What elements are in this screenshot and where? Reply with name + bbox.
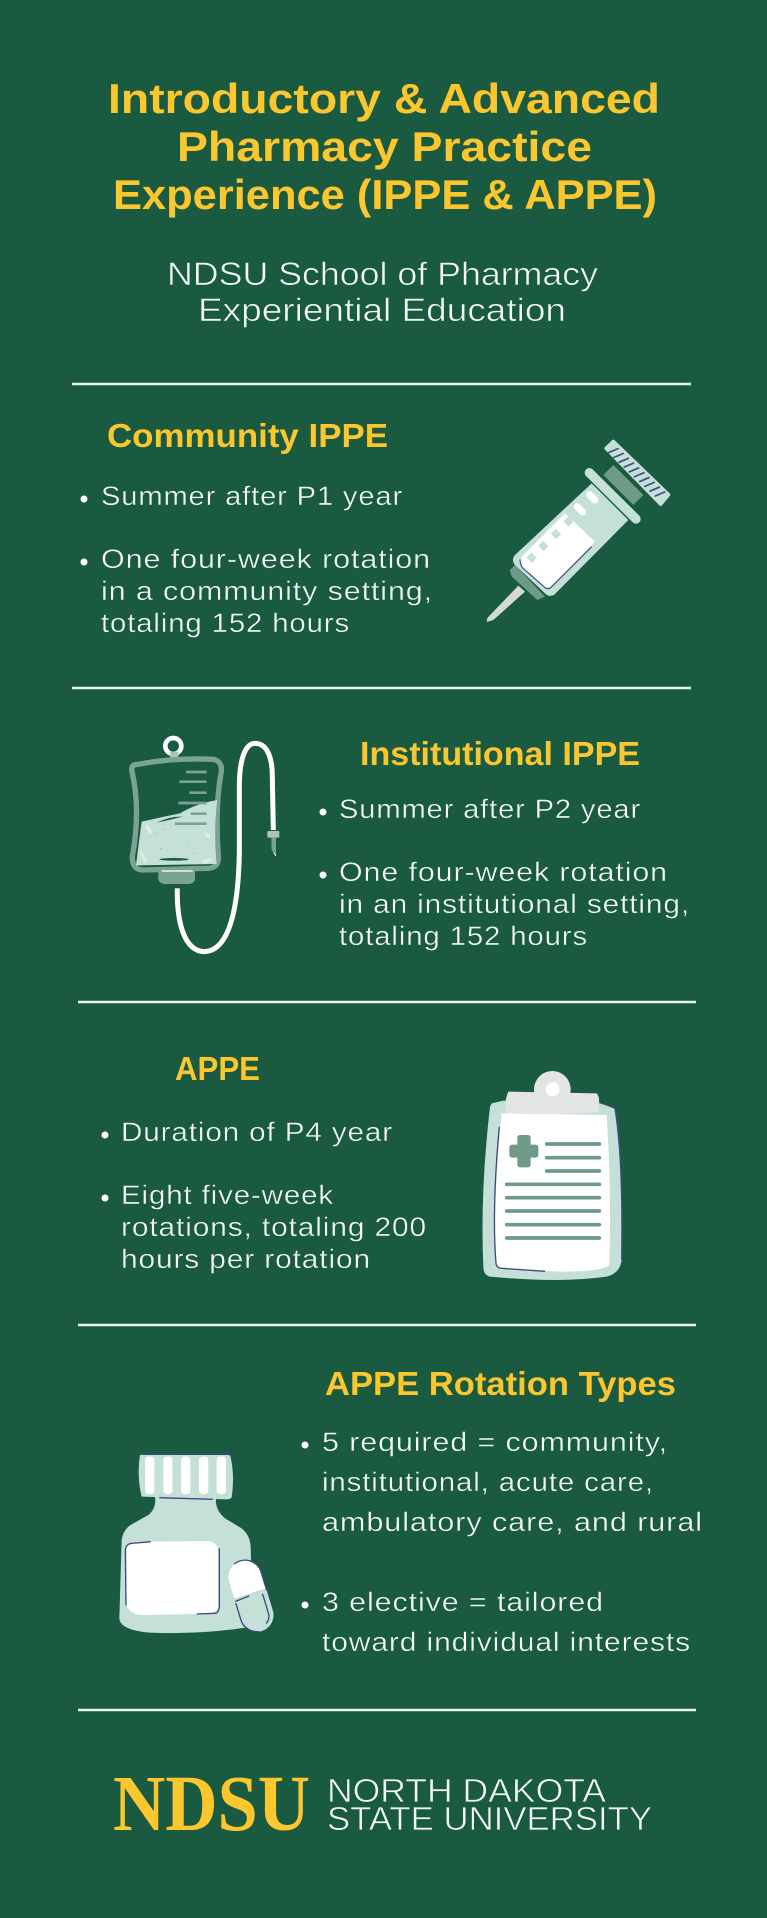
- heading: Institutional IPPE: Institutional IPPE: [360, 735, 640, 772]
- title: Pharmacy Practice: [177, 123, 592, 170]
- title: Introductory & Advanced: [108, 75, 660, 122]
- logo: NDSU North Dakota State University: NORTH DAKOTA: [327, 1773, 607, 1810]
- bullet list: Institutional IPPE: totaling 152 hours: [339, 921, 588, 951]
- bullet list: Institutional IPPE: Summer after P2 year: [339, 794, 641, 824]
- bullet list: APPE: Duration of P4 year: [121, 1117, 393, 1147]
- panel: Community IPPE: [80, 417, 669, 638]
- icon: IV bag: [132, 738, 279, 952]
- bullet list: rotation types: [302, 1427, 703, 1657]
- icon: syringe: [487, 441, 669, 622]
- bullet list: rotation types: 5 required = community,: [322, 1427, 668, 1457]
- title: Experience (IPPE & APPE): [113, 171, 657, 218]
- heading: Community IPPE: Community IPPE: [107, 417, 388, 454]
- bullet list: rotation types: ambulatory care, and rural: [322, 1507, 703, 1537]
- heading: APPE: APPE: [175, 1050, 260, 1087]
- bullet list: Community IPPE: totaling 152 hours: [101, 608, 350, 638]
- bullet list: APPE: rotations, totaling 200: [121, 1212, 427, 1242]
- subtitle: [167, 256, 598, 328]
- bullet list: Community IPPE: One four-week rotation: [101, 544, 431, 574]
- bullet list: APPE: Eight five-week: [121, 1180, 334, 1210]
- bullet list: rotation types: institutional, acute care,: [322, 1467, 654, 1497]
- logo: NDSU North Dakota State University: STATE UNIVERSITY: [327, 1801, 652, 1838]
- logo: NDSU North Dakota State University: [113, 1761, 652, 1848]
- heading: APPE Rotation Types: APPE Rotation Types: [325, 1365, 676, 1402]
- bullet list: Institutional IPPE: One four-week rotation: [339, 857, 668, 887]
- bullet list: Community IPPE: in a community setting,: [101, 576, 433, 606]
- logo: NDSU North Dakota State University: NDSU: [113, 1761, 310, 1848]
- panel: APPE Rotation Types: [119, 1365, 703, 1657]
- panel: APPE: [102, 1050, 622, 1280]
- icon: clipboard: [482, 1071, 622, 1280]
- bullet list: rotation types: 3 elective = tailored: [322, 1587, 604, 1617]
- subtitle: Experiential Education: [198, 292, 566, 328]
- bullet list: Institutional IPPE: [320, 794, 690, 951]
- bullet list: APPE: [102, 1117, 427, 1274]
- panel: Institutional IPPE: [132, 735, 690, 952]
- bullet list: rotation types: toward individual interests: [322, 1627, 691, 1657]
- bullet list: Institutional IPPE: in an institutional setting,: [339, 889, 690, 919]
- title: [108, 75, 660, 218]
- bullet list: Community IPPE: [80, 481, 433, 638]
- subtitle: NDSU School of Pharmacy: [167, 256, 598, 292]
- icon: pill bottle and capsule: [119, 1453, 278, 1636]
- bullet list: APPE: hours per rotation: [121, 1244, 371, 1274]
- bullet list: Community IPPE: Summer after P1 year: [101, 481, 403, 511]
